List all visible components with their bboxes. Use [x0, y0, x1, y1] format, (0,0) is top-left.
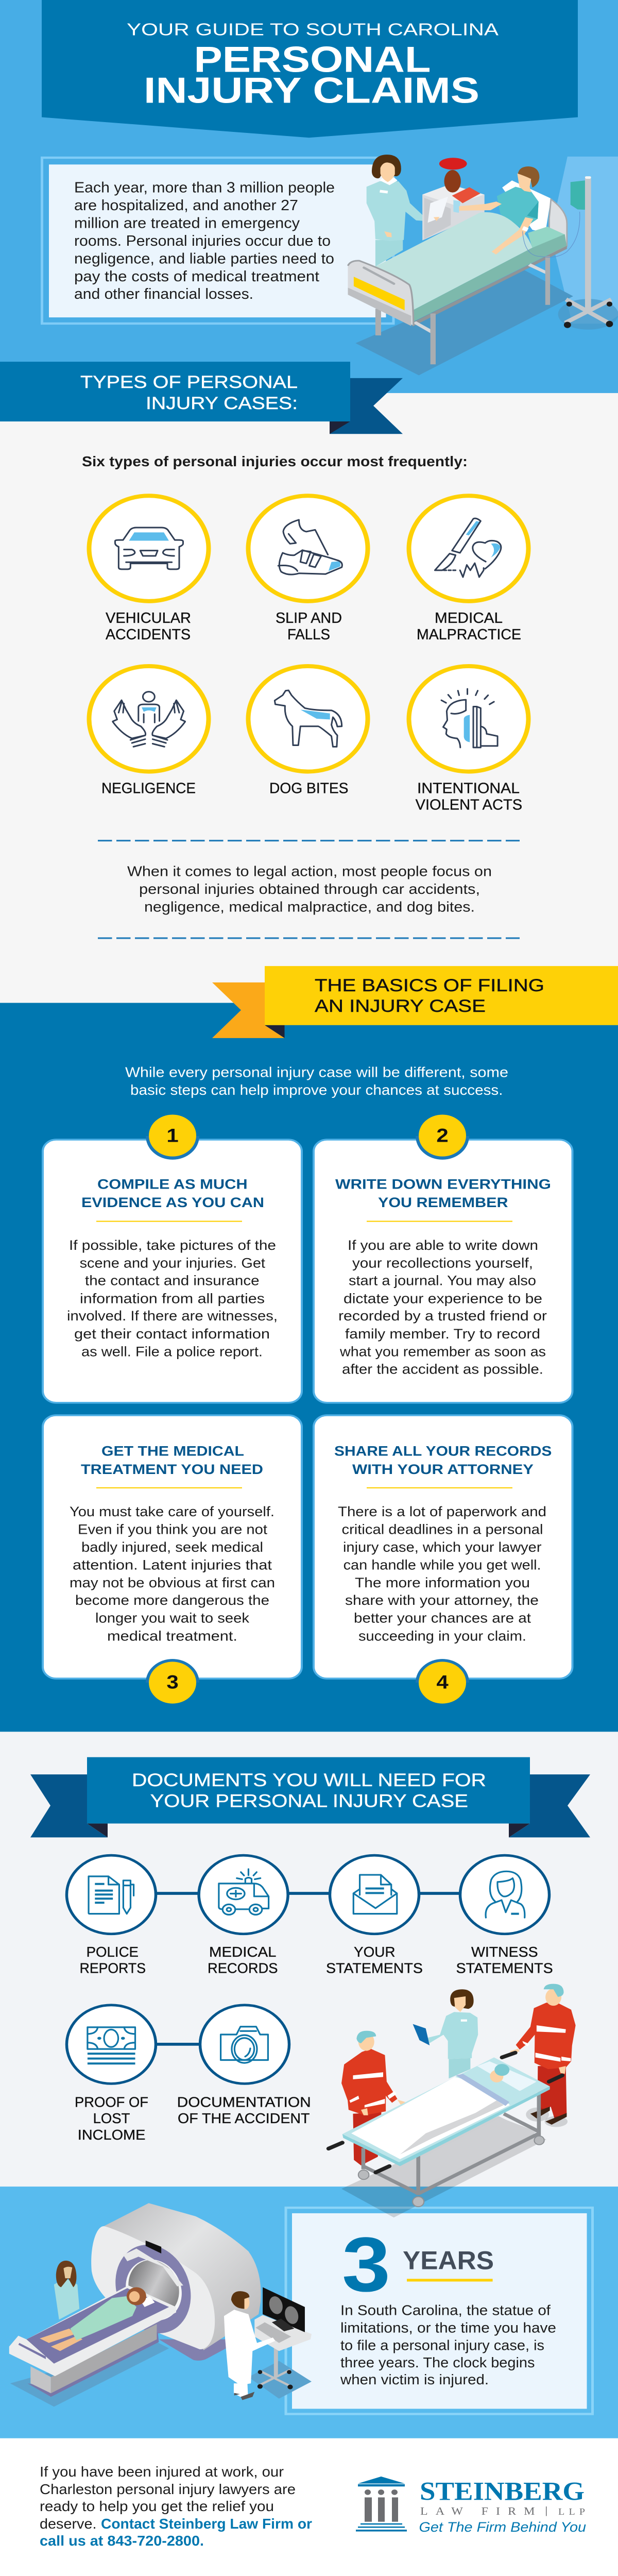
step heading: EVIDENCE AS YOU CAN	[81, 1195, 264, 1210]
step body: may not be obvious at first can	[70, 1574, 275, 1590]
icon labels: types of injury: VIOLENT ACTS	[416, 797, 522, 813]
step body: You must take care of yourself.	[70, 1504, 274, 1519]
step body: share with your attorney, the	[345, 1592, 539, 1608]
scanner table	[9, 2285, 176, 2397]
document labels: POLICE	[87, 1944, 139, 1960]
step body	[338, 1238, 547, 1377]
text block: basics intro	[125, 1065, 508, 1098]
closing text block: deserve.	[40, 2517, 97, 2532]
document icon: witness statements	[460, 1855, 549, 1934]
logo wordmark: STEINBERG	[420, 2477, 585, 2506]
illustration: MRI scanner scene	[9, 2203, 312, 2406]
icon labels: types of injury: INTENTIONAL	[417, 781, 520, 796]
document labels: OF THE ACCIDENT	[178, 2111, 310, 2127]
ribbon heading text: THE BASICS OF FILING	[315, 975, 544, 995]
document labels: YOUR	[354, 1944, 396, 1960]
document labels: PROOF OF	[75, 2095, 148, 2110]
step card 4	[314, 1415, 573, 1706]
statute paragraph: three years. The clock begins	[340, 2355, 535, 2371]
step body	[70, 1504, 275, 1643]
ribbon heading text: TYPES OF PERSONAL	[80, 372, 298, 392]
step body: injury case, which your lawyer	[343, 1539, 542, 1555]
section: statute background	[0, 2187, 618, 2438]
patient on table	[40, 2287, 155, 2351]
document icon: medical records	[199, 1855, 288, 1934]
panel: three years statute box	[286, 2208, 592, 2414]
step body: badly injured, seek medical	[81, 1539, 263, 1555]
iv stand	[523, 176, 613, 328]
step body: as well. File a police report.	[81, 1344, 263, 1359]
step heading: TREATMENT YOU NEED	[81, 1462, 263, 1477]
intro paragraph: rooms. Personal injuries occur due to	[74, 233, 331, 249]
step body: medical treatment.	[107, 1628, 237, 1643]
subheading: six types: Six types of personal injuries occur most frequently:	[82, 454, 468, 469]
technician at console	[224, 2287, 312, 2400]
paramedic left	[341, 2031, 405, 2165]
logo subline: LAW FIRM	[420, 2505, 535, 2517]
step heading	[334, 1443, 552, 1477]
intro paragraph: and other financial losses.	[74, 286, 253, 302]
step body: information from all parties	[80, 1291, 265, 1306]
step body: after the accident as possible.	[342, 1361, 543, 1377]
step body: dictate your experience to be	[344, 1291, 542, 1306]
closing text block: call us at 843-720-2800.	[40, 2534, 204, 2549]
step body: start a journal. You may also	[349, 1273, 536, 1288]
paper and glass	[427, 197, 448, 223]
icon circle: slip and falls	[248, 496, 368, 601]
title banner	[42, 0, 578, 138]
step body: Even if you think you are not	[78, 1521, 267, 1537]
step card 2	[314, 1112, 573, 1403]
step heading	[81, 1176, 264, 1210]
ribbon heading text: YOUR PERSONAL INJURY CASE	[150, 1791, 468, 1811]
intro paragraph	[74, 180, 335, 302]
intro paragraph: pay the costs of medical treatment	[74, 268, 320, 284]
document labels: REPORTS	[80, 1961, 146, 1976]
step heading: SHARE ALL YOUR RECORDS	[334, 1443, 552, 1459]
statute paragraph	[340, 2303, 556, 2388]
step body: critical deadlines in a personal	[342, 1521, 543, 1537]
icon labels: types of injury: DOG BITES	[269, 781, 349, 796]
step body: recorded by a trusted friend or	[338, 1308, 547, 1324]
closing text block: Contact Steinberg Law Firm or	[101, 2517, 312, 2532]
step body: There is a lot of paperwork and	[338, 1504, 546, 1519]
logo: Steinberg Law Firm	[356, 2477, 586, 2535]
heading ribbon: documents	[30, 1757, 590, 1837]
ribbon heading text: INJURY CASES:	[146, 393, 298, 413]
document labels: DOCUMENTATION	[177, 2095, 311, 2110]
step heading	[335, 1176, 551, 1210]
section: hero background	[0, 0, 618, 395]
step body	[67, 1238, 278, 1359]
title main: INJURY CLAIMS	[144, 70, 479, 110]
section: documents background	[0, 1732, 618, 2187]
ribbon heading text: DOCUMENTS YOU WILL NEED FOR	[132, 1770, 486, 1790]
step body	[338, 1504, 546, 1643]
step body: get their contact information	[74, 1326, 270, 1342]
document labels: LOST	[93, 2111, 130, 2127]
text block: basics intro: While every personal injury case will be different, some	[125, 1065, 508, 1080]
closing text block	[40, 2465, 312, 2549]
step heading: WITH YOUR ATTORNEY	[352, 1462, 534, 1477]
document labels	[75, 1944, 553, 2143]
heading ribbon: basics of filing	[212, 966, 618, 1038]
step body: better your chances are at	[354, 1610, 531, 1625]
title main: PERSONAL	[194, 39, 431, 79]
assistant	[54, 2261, 79, 2319]
intro paragraph: million are treated in emergency	[74, 215, 300, 231]
icon labels: types of injury: ACCIDENTS	[106, 627, 191, 643]
icon labels: types of injury: MALPRACTICE	[417, 627, 521, 643]
closing text block: Charleston personal injury lawyers are	[40, 2482, 296, 2498]
step body: family member. Try to record	[345, 1326, 540, 1342]
step heading: WRITE DOWN EVERYTHING	[335, 1176, 551, 1192]
bedside table with flowers and book	[422, 158, 485, 241]
logo: Steinberg Law Firm: LLP	[558, 2507, 585, 2517]
intro paragraph: negligence, and liable parties need to	[74, 251, 334, 267]
document labels: INCLOME	[78, 2128, 145, 2143]
icon labels: types of injury: MEDICAL	[435, 611, 503, 626]
document labels: STATEMENTS	[456, 1961, 553, 1976]
intro paragraph: are hospitalized, and another 27	[74, 198, 298, 214]
document labels: STATEMENTS	[326, 1961, 423, 1976]
title main	[144, 39, 479, 110]
icon labels: types of injury: NEGLIGENCE	[101, 781, 196, 796]
intro paragraph: Each year, more than 3 million people	[74, 180, 335, 196]
section: footer background	[0, 2438, 618, 2576]
step number: 2	[436, 1125, 449, 1146]
step body: can handle while you get well.	[344, 1557, 541, 1572]
panel: intro text box	[42, 158, 393, 324]
years label: YEARS	[403, 2246, 494, 2275]
statute paragraph: to file a personal injury case, is	[340, 2338, 544, 2353]
logo tagline: Get The Firm Behind You	[419, 2519, 586, 2535]
step heading: COMPILE AS MUCH	[97, 1176, 248, 1192]
connector lines between document icons	[154, 1892, 462, 2046]
heading ribbon: types of personal injury cases	[0, 362, 403, 434]
step number: 1	[166, 1125, 179, 1146]
step body: your recollections yourself,	[352, 1255, 533, 1270]
step number: 4	[436, 1672, 449, 1693]
statute paragraph: In South Carolina, the statue of	[340, 2303, 551, 2318]
step card 3	[43, 1415, 302, 1706]
text block: legal action summary: personal injuries obtained through car accidents,	[139, 882, 480, 897]
big number 3: 3	[342, 2221, 390, 2308]
statute paragraph: when victim is injured.	[340, 2372, 489, 2388]
bed	[348, 199, 567, 364]
text block: basics intro: basic steps can help improve your chances at success.	[130, 1083, 503, 1098]
patient	[459, 166, 551, 233]
gurney	[329, 2053, 562, 2207]
icon labels: types of injury: FALLS	[287, 627, 330, 643]
step card 1	[43, 1112, 302, 1403]
icon circle: vehicular accidents	[89, 496, 209, 601]
step body: what you remember as soon as	[339, 1344, 546, 1359]
step body: involved. If there are witnesses,	[67, 1308, 278, 1324]
closing text block: If you have been injured at work, our	[40, 2465, 284, 2480]
title eyebrow: YOUR GUIDE TO SOUTH CAROLINA	[127, 20, 499, 39]
ribbon heading text	[80, 372, 298, 413]
closing text block: ready to help you get the relief you	[40, 2499, 274, 2515]
illustration: stretcher scene	[329, 1984, 576, 2217]
step heading: YOU REMEMBER	[378, 1195, 508, 1210]
icon circle: medical malpractice	[409, 496, 528, 601]
icon labels: types of injury	[101, 611, 522, 813]
text block: legal action summary: negligence, medical malpractice, and dog bites.	[144, 900, 475, 915]
illustration: hospital bed scene	[348, 155, 618, 375]
step heading	[81, 1443, 263, 1477]
document icon: documentation of the accident	[200, 2005, 289, 2083]
step body: the contact and insurance	[85, 1273, 260, 1288]
step body: If possible, take pictures of the	[69, 1238, 276, 1253]
section: basics background	[0, 1003, 618, 1732]
step number: 3	[166, 1672, 179, 1693]
nurse	[367, 155, 430, 266]
document icon: police reports	[67, 1855, 156, 1934]
nurse with clipboard	[413, 1989, 478, 2078]
statute paragraph: limitations, or the time you have	[340, 2320, 556, 2336]
document labels: RECORDS	[208, 1961, 278, 1976]
step heading: GET THE MEDICAL	[101, 1443, 244, 1459]
icon circle: negligence	[89, 666, 209, 772]
section: types background	[0, 393, 618, 1003]
icon labels: types of injury: VEHICULAR	[106, 611, 191, 626]
icon circle: dog bites	[248, 666, 368, 772]
step body: The more information you	[355, 1574, 530, 1590]
ribbon heading text	[132, 1770, 486, 1811]
document labels: WITNESS	[471, 1944, 538, 1960]
document icon: proof of lost income	[67, 2005, 156, 2083]
ribbon heading text	[315, 975, 544, 1016]
step body: longer you wait to seek	[95, 1610, 250, 1625]
text block: legal action summary	[127, 864, 492, 915]
step body: If you are able to write down	[348, 1238, 538, 1253]
step body: become more dangerous the	[75, 1592, 269, 1608]
text block: legal action summary: When it comes to legal action, most people focus on	[127, 864, 492, 879]
icon labels: types of injury: SLIP AND	[276, 611, 342, 626]
step body: scene and your injuries. Get	[80, 1255, 265, 1270]
step body: succeeding in your claim.	[358, 1628, 526, 1643]
step body: attention. Latent injuries that	[73, 1557, 272, 1572]
scanner	[91, 2203, 261, 2361]
document labels: MEDICAL	[209, 1944, 277, 1960]
ribbon heading text: AN INJURY CASE	[315, 996, 486, 1016]
document icon: your statements	[330, 1855, 419, 1934]
paramedic right	[510, 1984, 576, 2127]
icon circle: intentional violent acts	[409, 666, 528, 772]
